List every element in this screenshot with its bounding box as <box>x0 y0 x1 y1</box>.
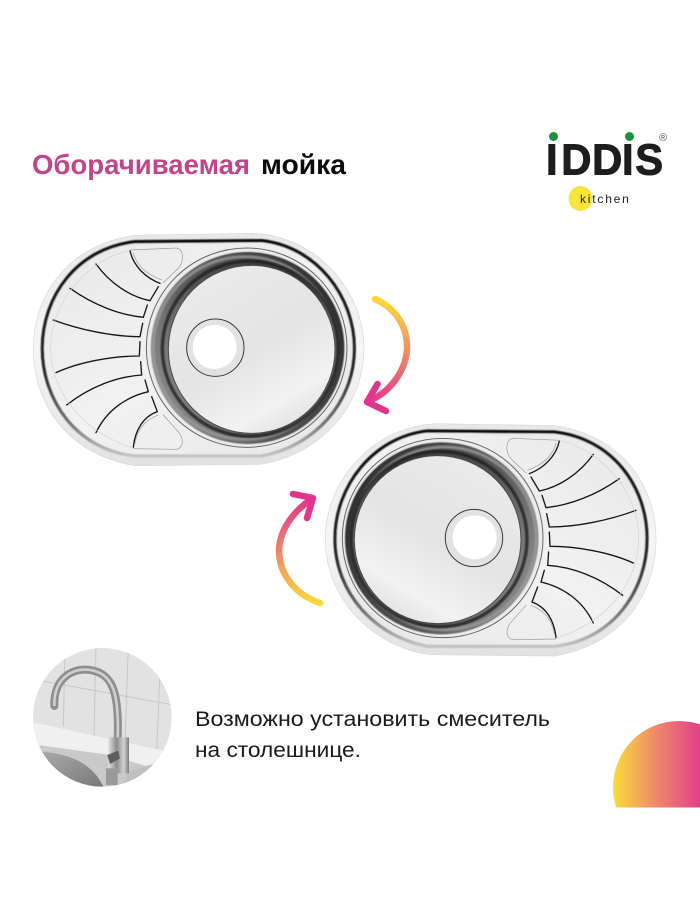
sink: top left position <box>33 233 364 466</box>
title pink word: Оборачиваемая <box>32 149 250 180</box>
photo: faucet on countertop <box>33 648 172 787</box>
arrow: clockwise down <box>367 299 407 411</box>
description text: на столешнице. <box>195 738 361 762</box>
logo green dots <box>549 132 634 141</box>
title black word: мойка <box>261 149 347 180</box>
title <box>32 149 347 180</box>
logo wordmark: IDDIS <box>546 136 663 185</box>
sink: rotated bottom right position <box>325 424 656 656</box>
logo: IDDIS kitchen <box>546 132 667 211</box>
logo yellow blob <box>568 186 592 211</box>
decorative gradient circle <box>613 721 700 808</box>
arrow: clockwise up <box>279 494 320 603</box>
logo kitchen word: kitchen <box>580 192 631 206</box>
description text: Возможно установить смеситель <box>195 707 550 731</box>
logo registered mark: ® <box>659 132 667 144</box>
